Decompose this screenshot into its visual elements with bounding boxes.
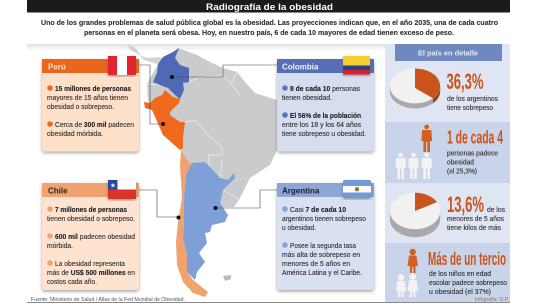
icon: flag of Colombia xyxy=(343,56,370,74)
stat: 1 de cada 4: personas padece xyxy=(447,150,498,158)
panel: Perú: Cerca de 300 mil padecen xyxy=(55,121,134,129)
stat: 1 de cada 4: obesidad xyxy=(447,158,474,166)
map: Falkland Islands xyxy=(223,275,231,281)
stat: Más de un tercio: u obesidad (el 37%) xyxy=(429,288,491,296)
leader dots xyxy=(161,75,218,220)
people white xyxy=(395,153,432,179)
map: Chile xyxy=(176,150,208,297)
icon: flag of Argentina xyxy=(343,180,371,198)
stat: 36,3% xyxy=(446,69,498,112)
panel: Perú xyxy=(42,56,139,152)
panel: Argentina: América Latina y el Caribe. xyxy=(282,269,362,277)
panel: Argentina: Casi 7 de cada 10 xyxy=(290,206,346,214)
background fade under intro xyxy=(27,44,385,51)
panel: Chile: 600 mil padecen obesidad xyxy=(55,233,135,241)
panel: Chile xyxy=(42,180,139,290)
panel: Colombia xyxy=(277,56,374,152)
stat: 13,6% xyxy=(447,192,505,232)
panel: Colombia: 8 de cada 10 personas xyxy=(290,85,360,93)
panel: Perú: obesidad o sobrepeso. xyxy=(47,103,114,111)
panel: Argentina xyxy=(277,180,374,290)
map of South America xyxy=(127,44,300,297)
stat: 1 de cada 4 xyxy=(447,126,503,176)
stat: 13,6%: tiene kilos de más xyxy=(447,224,501,232)
panel: Perú: 15 millones de personas xyxy=(55,85,131,93)
panel: Chile: costos cada año. xyxy=(47,278,97,286)
title bar: Radiografía de la obesidad xyxy=(206,2,333,13)
map: Central America xyxy=(127,44,163,64)
pie chart: 13,6% xyxy=(390,193,440,237)
stat: 13,6%: 13,6% xyxy=(447,192,484,217)
stat: 13,6%: menores de 5 años xyxy=(447,215,504,223)
panel: El país en detalle xyxy=(385,44,510,303)
panel: Chile: más de US$ 500 millones en xyxy=(47,269,135,277)
panel: Argentina: menores de 5 años en xyxy=(282,260,350,268)
header: Perú: Perú xyxy=(48,62,66,72)
leader lines xyxy=(139,65,277,217)
stat: Más de un tercio: de los niños en edad xyxy=(429,270,491,278)
panel heading: El país en detalle xyxy=(418,48,478,58)
panel: Colombia: El 56% de la población xyxy=(290,112,361,120)
panel: Argentina: u obesidad. xyxy=(282,224,316,232)
panel: Perú: obesidad mórbida. xyxy=(47,130,103,138)
icon: flag of Chile: ★ xyxy=(110,182,116,190)
title bar xyxy=(27,0,510,13)
icon: flag of Peru xyxy=(108,56,136,75)
panel: Argentina: argentinos tienen sobrepeso xyxy=(282,215,366,223)
panel: Chile: tienen obesidad o sobrepeso. xyxy=(47,215,135,223)
icon: one orange and three white people xyxy=(395,125,432,179)
panel: Argentina: Posee la segunda tasa xyxy=(290,242,356,250)
map: Peru xyxy=(144,90,185,150)
stat: 1 de cada 4: (el 25,3%) xyxy=(447,168,477,176)
stat: Más de un tercio: escolar padece sobrepeso xyxy=(429,279,507,287)
stat: 36,3%: 36,3% xyxy=(446,69,484,94)
stat: 13,6%: de los xyxy=(487,206,505,214)
map: Colombia xyxy=(153,48,189,99)
map: Argentina xyxy=(183,162,235,280)
stat: 36,3%: tiene sobrepeso xyxy=(447,104,493,112)
credit: Infografía: O.P. xyxy=(475,297,509,303)
panel: Colombia: tiene sobrepeso u obesidad. xyxy=(282,130,366,138)
map: grey continent xyxy=(147,48,300,215)
header: Argentina: Argentina xyxy=(282,186,320,196)
intro text xyxy=(41,19,499,37)
intro text: Uno de los grandes problemas de salud pública global es la obesidad. Las proyecciones indican que, en el año 2035, una de cada cuatro xyxy=(41,19,499,27)
panel heading xyxy=(395,44,502,61)
icon: one orange and two white children xyxy=(396,249,418,297)
intro text: personas en el planeta será obesa. Hoy, en nuestro país, 6 de cada 10 mayores de edad tienen exceso de peso. xyxy=(84,29,454,37)
panel: Perú: mayores de 15 años tienen xyxy=(47,94,128,102)
panel: Chile: 7 millones de personas xyxy=(55,206,127,214)
header: Chile: Chile xyxy=(48,186,68,196)
panel: Colombia: tienen obesidad. xyxy=(282,94,332,102)
panel: Chile: mórbida. xyxy=(47,242,73,250)
person orange xyxy=(421,125,432,152)
pie chart: 36,3% xyxy=(390,68,440,109)
stat: 36,3%: de los argentinos xyxy=(447,95,498,103)
panel: Colombia: entre los 18 y los 64 años xyxy=(282,121,361,129)
panel: Argentina: más alta de sobrepeso en xyxy=(282,251,360,259)
stat: Más de un tercio xyxy=(428,248,507,296)
source note: Fuente: Ministerio de Salud / Atlas de la Fed Mundial de Obesidad. xyxy=(31,297,185,303)
panel: Chile: La obesidad representa xyxy=(55,260,125,268)
header: Colombia: Colombia xyxy=(282,62,319,72)
map: internal borders xyxy=(147,68,240,200)
